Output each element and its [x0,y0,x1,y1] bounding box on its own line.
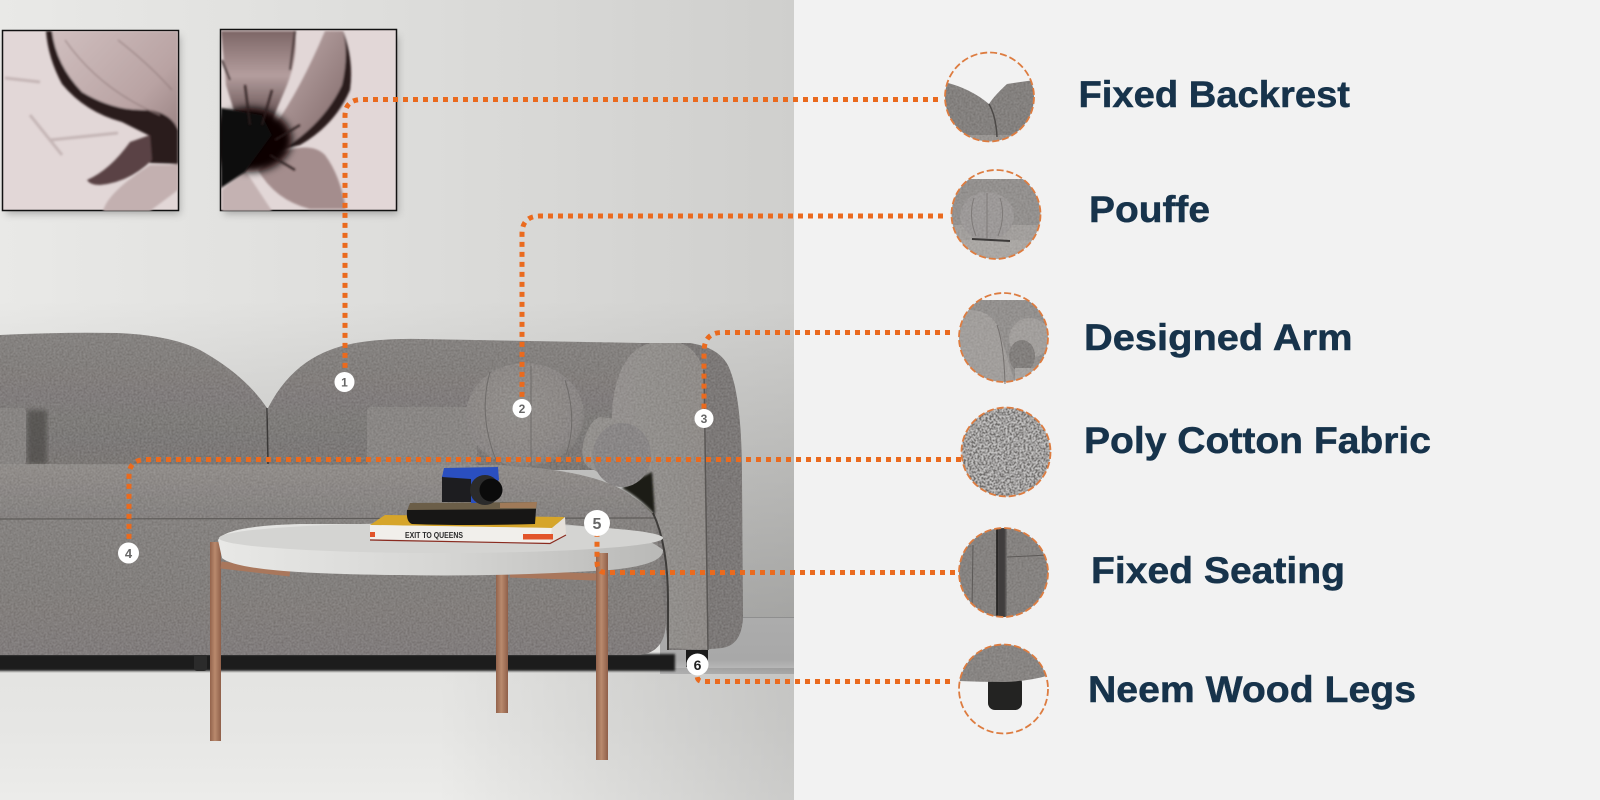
sofa [0,333,743,671]
table leg back [496,570,508,713]
label: Fixed Backrest: Fixed Backrest [1078,74,1350,115]
marker 6 [686,654,708,676]
marker 2 [512,399,532,418]
detail thumbnail: pouffe [950,170,1042,262]
lower book [370,515,566,544]
leader line 2 [522,216,943,400]
sofa leg right [686,650,708,667]
leader line 6 [697,675,950,682]
outer arm and panel [612,343,743,650]
marker 1: 1 [341,376,348,390]
detail thumbnail: wood legs [958,644,1050,734]
table leg left [210,542,221,741]
label: Designed Arm: Designed Arm [1084,317,1352,358]
room photo: wall and floor [0,0,794,800]
label: Fixed Seating: Fixed Seating [1091,550,1345,591]
table leg right [596,553,608,760]
books and camera [370,467,566,544]
right panel background [794,0,1600,800]
label: Poly Cotton Fabric: Poly Cotton Fabric [1084,420,1431,461]
pouffe seams [485,366,572,466]
label: Pouffe: Pouffe [1089,189,1210,230]
detail thumbnail: fixed seating [958,527,1050,619]
marker 4: 4 [125,546,133,561]
marker 5 [584,510,610,536]
ball pouffe [466,363,584,467]
table top [218,523,663,575]
bolster cushions [0,407,477,465]
lower book: EXIT TO QUEENS [405,531,464,540]
table braces [221,565,596,577]
marker 3 [694,409,714,428]
marker 6: 6 [694,657,702,673]
back upholstery [0,333,660,470]
marker 3: 3 [701,412,708,426]
bolster shadow [27,410,47,464]
marker 4 [118,542,139,564]
detail thumbnail: fixed backrest [944,52,1035,143]
seat and base [0,464,666,655]
bolster shadow dark [622,472,655,515]
leader line 3 [704,332,950,410]
coffee table [210,523,663,760]
sofa leg left [194,654,207,671]
backrest crease [267,408,268,464]
detail thumbnail: designed arm [958,293,1051,386]
marker 2: 2 [519,402,526,416]
black book [407,502,537,525]
seat seam [0,518,655,519]
arm seams [704,370,708,650]
wall art: right painting [208,30,398,214]
leader line 5 [597,535,955,572]
detail thumbnail: fabric [960,406,1052,498]
leader line 1 [345,100,938,372]
bolster near arm [582,417,651,487]
wall art: left painting [2,30,180,214]
marker 1 [334,372,354,392]
marker 5: 5 [593,516,602,533]
sofa shadow on floor [0,654,675,671]
camera [442,467,502,505]
label: Neem Wood Legs: Neem Wood Legs [1088,669,1416,710]
leader line 4 [129,460,961,542]
